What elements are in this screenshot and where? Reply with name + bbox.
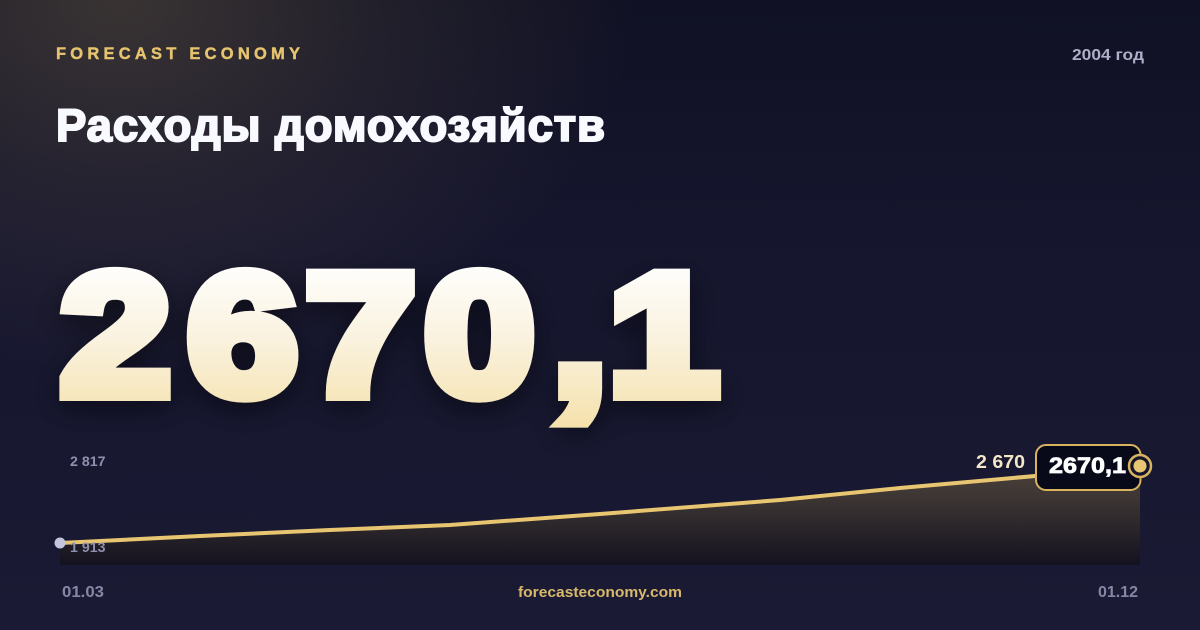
start date: 01.03	[62, 584, 104, 601]
big value: 2670,1	[61, 239, 719, 431]
year label: 2004 год	[1072, 47, 1144, 64]
value callout: 2670,1	[1049, 453, 1126, 478]
axis max label: 2 817	[70, 453, 106, 469]
site link: forecasteconomy.com	[518, 584, 682, 601]
chart line	[60, 467, 1140, 543]
brand label: FORECAST ECONOMY	[56, 45, 300, 63]
start point	[54, 538, 66, 548]
title: Расходы домохозяйств	[56, 100, 605, 151]
value callout	[1036, 445, 1140, 490]
end value label: 2 670	[976, 452, 1025, 472]
chart area fill	[60, 467, 1140, 565]
axis min label: 1 913	[70, 539, 106, 555]
line chart	[54, 445, 1151, 565]
end date: 01.12	[1098, 584, 1138, 601]
end point marker	[1129, 455, 1151, 477]
